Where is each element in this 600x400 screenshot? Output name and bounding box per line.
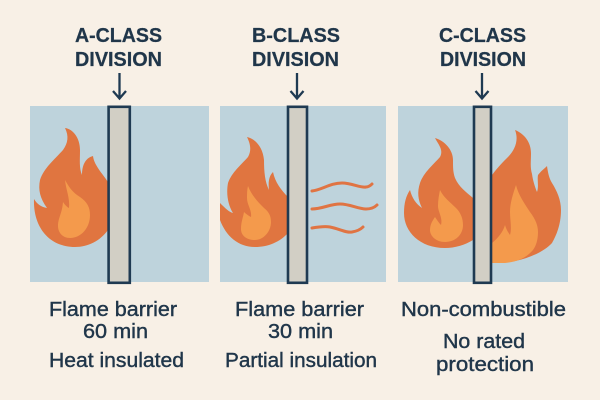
caption: A-class [49, 298, 184, 372]
heading: A-class division: DIVISION [75, 48, 162, 71]
heading: A-class division: A-CLASS [75, 24, 162, 47]
caption: A-class: Heat insulated [49, 349, 184, 372]
arrow: C-class [476, 73, 488, 98]
caption: A-class: 60 min [83, 320, 148, 343]
panel: A-class division [30, 24, 209, 372]
icon: right flame [492, 130, 561, 263]
panel: B-class division [220, 24, 386, 372]
heading: B-class division: DIVISION [252, 48, 339, 71]
heading: C-class division [439, 24, 526, 71]
caption: C-class: Non-combustible [401, 298, 566, 321]
heading: C-class division: C-CLASS [439, 24, 526, 47]
wall: A-class barrier [109, 107, 130, 283]
caption: B-class: 30 min [268, 320, 333, 343]
icon: left flame [404, 138, 473, 248]
wall: B-class barrier [288, 107, 307, 283]
arrow: B-class [290, 73, 304, 98]
caption: A-class: Flame barrier [49, 298, 177, 321]
icon: heat waves [312, 183, 377, 232]
caption: C-class [401, 298, 566, 376]
scene background: A-class [30, 106, 209, 282]
wall: C-class barrier [474, 107, 491, 283]
caption: B-class: Partial insulation [225, 349, 377, 372]
scene background: C-class [398, 106, 568, 282]
panel: C-class division [398, 24, 568, 376]
caption: C-class: No rated [443, 330, 525, 353]
icon: flame [220, 137, 288, 247]
caption: B-class [225, 298, 377, 372]
arrow: A-class [113, 73, 126, 98]
icon: flame [34, 128, 108, 247]
heading: B-class division [252, 24, 340, 71]
scene background: B-class [220, 106, 386, 282]
caption: B-class: Flame barrier [235, 298, 364, 321]
caption: C-class: protection [436, 353, 534, 376]
heading: C-class division: DIVISION [440, 48, 526, 71]
heading: B-class division: B-CLASS [252, 24, 340, 47]
heading: A-class division [75, 24, 162, 71]
